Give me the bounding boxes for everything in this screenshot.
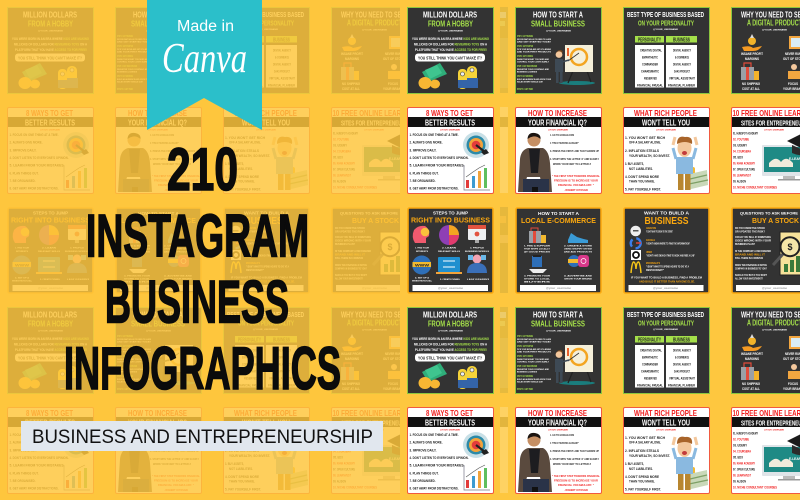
tile: questions to ask before buying a stock: IS THE COMPANY A RECOGNIZED xyxy=(735,250,771,253)
tile: how to increase your financial iq: 3. PRESS THE FIRST LINK THAT SHOWS UP xyxy=(550,149,599,153)
tile: how to start a small business: RAISE THE MONEY YOU NEED AND xyxy=(517,58,549,61)
tile: questions to ask before buying a stock: BUSINESS PLAN? xyxy=(735,243,756,246)
tile: 8 ways to get better results: 1. FOCUS ON ONE THING AT A TIME. xyxy=(410,133,458,137)
tile: best type of business based on your personality: VIRTUAL ASSISTANT xyxy=(669,76,695,81)
tile: how to start a local e-commerce: STORE TO LOCAL xyxy=(524,278,551,280)
tile: how to start a small business: AND YOUR FIRST PRODUCTS xyxy=(517,50,552,54)
tile: how to start a small business: STEP 1: GET TRAINING xyxy=(517,35,533,38)
tile: million dollars from a hobby: YOU STILL THINK YOU CAN'T MAKE IT? xyxy=(418,55,482,60)
tile: how to start a small business: STEP 3: GET FUNDING xyxy=(517,56,533,58)
tile: questions to ask before buying a stock: SHOULD YOU BUY IF YOU DON'T xyxy=(735,274,767,277)
tile: 10 free online learning sites for entrepreneurs: 04. COURSERA xyxy=(733,150,751,154)
tile: want to build a business: AMAZON xyxy=(646,227,656,230)
tile: best type of business based on your personality: RESERVED xyxy=(644,76,657,81)
tile: what rich people won't tell you: WON'T TELL YOU xyxy=(642,118,690,127)
tile: 10 free online learning sites for entrepreneurs: 06. KHAN ACADEMY xyxy=(733,162,755,166)
tile: how to increase your financial iq: 4. START WITH THE LETTER 'A' AND SLOWLY xyxy=(550,157,599,161)
tile: how to start a local e-commerce: USING SHOPIFY OR WIX xyxy=(564,248,593,250)
tile: million dollars from a hobby: FROM A HOBBY xyxy=(428,19,473,29)
tile: what rich people won't tell you: NOT LIABILITIES. xyxy=(629,167,653,171)
tile: how to start a local e-commerce: LOCAL E-COMMERCE xyxy=(521,218,596,225)
tile: 8 ways to get better results: 8. GET AWAY FROM DISTRACTIONS. xyxy=(410,187,458,191)
tile: want to build a business: "I DON'T WANT TO GROW TO THE STORE" xyxy=(646,230,673,234)
tile: 10 free online learning sites for entrepreneurs: @YOUR_USERNAME xyxy=(764,128,784,131)
tile: million dollars from a hobby: PLATFORM THAT YOU HAVE ACCESS TO FOR FREE! xyxy=(415,48,487,52)
tile: best type of business based on your personality: @YOUR_USERNAME xyxy=(653,28,679,31)
tile: how to increase your financial iq: " THE FIRST STEP TOWARDS FINANCIAL xyxy=(552,174,600,178)
tile row 4 and row 5: repeated tiles xyxy=(408,308,800,494)
faded strip between first and second tile columns xyxy=(500,7,508,493)
tile: want to build a business: IF YOU WANT TO BUILD A BUSINESS, FIND A PROBLEM xyxy=(631,276,702,280)
tile: steps to jump right into business: RIGHT INTO BUSINESS xyxy=(411,216,490,225)
tile: best type of business based on your personality xyxy=(624,8,710,94)
tile: steps to jump right into business: 6. BUILD YOUR AUDIENCE xyxy=(467,278,489,281)
tile: million dollars from a hobby xyxy=(408,8,494,94)
tile: how to start a small business: STEP 6: GET PAID xyxy=(517,88,533,91)
tile: million dollars from a hobby: @YOUR_USERNAME xyxy=(438,29,464,32)
tile: 10 free online learning sites for entrepreneurs: 05. EDX xyxy=(733,156,744,160)
tile: best type of business based on your personality: EMPATHETIC xyxy=(642,54,658,59)
tile: questions to ask before buying a stock: BRAND AND WILL IT xyxy=(735,254,766,256)
tile: best type of business based on your personality: BUSINESS xyxy=(673,37,690,43)
tile: how to start a small business: @YOUR_USERNAME xyxy=(546,29,572,32)
title: 210 instagram business infographics: INFOGRAPHICS xyxy=(64,335,341,402)
tile: how to start a local e-commerce: GROW YOUR BRAND xyxy=(564,278,593,280)
tile: questions to ask before buying a stock: ALLOW YOUR INVESTMENT? xyxy=(735,278,763,280)
tile: want to build a business: "I DON'T HAVE ENOUGH TIME TO BOOK AND RIDE A CAB" xyxy=(646,254,695,258)
tile: why you need to sell a digital product: FOCUS xyxy=(788,82,798,86)
tile wall on the right half xyxy=(408,8,800,494)
tile: want to build a business xyxy=(624,208,709,293)
faded tile wall on the left half xyxy=(8,8,418,494)
tile: how to start a local e-commerce: AT GOOD PRICES xyxy=(524,250,551,254)
tile: want to build a business: GOOGLE xyxy=(646,239,655,242)
title: 210 instagram business infographics: INSTAGRAM xyxy=(86,202,309,270)
tile: what rich people won't tell you: 4. DON'T SPEND MORE xyxy=(625,175,659,179)
tile: what rich people won't tell you: YOUR WEALTH, SO INVEST. xyxy=(629,154,670,158)
tile: 10 free online learning sites for entrepreneurs: 01. HUBSPOT ACADEMY xyxy=(733,132,758,136)
tile: questions to ask before buying a stock: DOES THE FINANCIALS MATCH xyxy=(735,264,767,267)
tile: how to start a local e-commerce: THAT SHIPS LOCALLY xyxy=(524,248,551,250)
tile: want to build a business: MCDONALD'S xyxy=(646,262,660,265)
tile: how to start a small business: SMALL BUSINESS xyxy=(531,19,585,29)
tile: questions to ask before buying a stock: GOES WRONG WITH YOUR xyxy=(735,240,771,242)
tile: questions to ask before buying a stock: DO YOU KNOW THE STOCK xyxy=(735,227,765,230)
tile: how to increase your financial iq: 1. GO TO GOOGLE.COM xyxy=(550,133,574,137)
tile: best type of business based on your personality: FINANCIAL PLANNER xyxy=(668,83,695,88)
tile: what rich people won't tell you xyxy=(624,108,710,194)
tile: 8 ways to get better results: @YOUR_USERNAME xyxy=(440,128,460,131)
ribbon: made in canva: Made in xyxy=(177,18,234,35)
tile: 10 free online learning sites for entrepreneurs: 09. ALISON xyxy=(733,180,746,184)
tile: why you need to sell a digital product xyxy=(732,8,800,94)
ribbon: made in canva: Canva xyxy=(162,36,247,82)
tile: 8 ways to get better results: 4. DON'T LISTEN TO EVERYONE'S OPINION. xyxy=(410,156,468,160)
tile: steps to jump right into business: WWW xyxy=(415,263,430,267)
tile: how to increase your financial iq: HOW TO INCREASE xyxy=(528,108,587,118)
tile: how to start a local e-commerce: 2. CREATE A STORE xyxy=(564,244,593,248)
tile: questions to ask before buying a stock: OR UPDATED THE RISK? xyxy=(735,230,766,234)
tile: best type of business based on your personality: ON YOUR PERSONALITY xyxy=(638,18,694,27)
tile: how to start a local e-commerce: 3. PROMOTE YOUR xyxy=(524,276,551,278)
tile: best type of business based on your personality: E-COMMERCE xyxy=(675,54,689,59)
tile: steps to jump right into business: STEPS TO JUMP xyxy=(433,210,468,216)
tile: how to increase your financial iq xyxy=(516,108,602,194)
tile: how to start a small business: BUILD AN AUDIENCE AND GROW YOUR xyxy=(517,78,551,81)
tile: what rich people won't tell you: 2. INFLATION STEALS xyxy=(625,149,659,153)
tile: questions to ask before buying a stock: QUESTIONS TO ASK BEFORE xyxy=(740,211,798,216)
tile: what rich people won't tell you: OFF A SALARY ALONE. xyxy=(629,140,661,144)
tile: 8 ways to get better results: 2. ALWAYS GIVE MORE. xyxy=(410,141,442,145)
tile: want to build a business: AND BUILD IT BETTER THAN ANYONE ELSE. xyxy=(639,280,695,284)
tile: what rich people won't tell you: @YOUR_USERNAME xyxy=(656,128,676,131)
tile: how to increase your financial iq: FREEDOM IS TO INCREASE YOUR xyxy=(554,178,599,182)
tile: 8 ways to get better results: 6. PLAN THINGS OUT. xyxy=(410,171,439,175)
tile: 8 ways to get better results: 3. IMPROVE DAILY. xyxy=(410,148,436,152)
tile: 10 free online learning sites for entrepreneurs: 02. YOUTUBE xyxy=(733,138,750,142)
tile: questions to ask before buying a stock: STILL THERE IN 10 MONTHS xyxy=(735,257,763,260)
tile: why you need to sell a digital product: NO SHIPPING xyxy=(742,82,760,86)
tile: best type of business based on your personality: CREATIVE DIGITAL xyxy=(640,47,662,52)
tile: questions to ask before buying a stock: COULD YOU SELL IF SOMETHING xyxy=(735,236,771,239)
tile: million dollars from a hobby: MILLIONS OF DOLLARS FOR REVIEWING TOYS ON A xyxy=(414,42,487,46)
tile: how to start a local e-commerce: 4. ADVERTISE AND xyxy=(564,274,593,278)
tile: steps to jump right into business: 5. CREATE FUNNEL xyxy=(440,278,461,281)
tile: 10 free online learning sites for entrepreneurs xyxy=(732,108,800,194)
tile: steps to jump right into business: WEBSITE/SOCIAL xyxy=(412,280,433,282)
tile: best type of business based on your personality: CHARISMATIC xyxy=(641,68,659,74)
tile: best type of business based on your personality: COMMANDER xyxy=(642,61,658,66)
tile: best type of business based on your personality: BEST TYPE OF BUSINESS BASED xyxy=(627,10,704,19)
tile: what rich people won't tell you: 3. BUY ASSETS, xyxy=(625,162,644,166)
tile: want to build a business: WANT TO BUILD A xyxy=(644,211,690,216)
tile: how to increase your financial iq: @YOUR_USERNAME xyxy=(548,128,568,131)
tile: why you need to sell a digital product: COST AT ALL xyxy=(742,87,760,91)
tile: want to build a business: @your_username xyxy=(653,286,678,290)
tile: 8 ways to get better results xyxy=(408,108,494,194)
title: 210 instagram business infographics: 210 xyxy=(167,136,238,203)
subtitle banner: BUSINESS AND ENTREPRENEURSHIP xyxy=(32,426,373,448)
tile: 10 free online learning sites for entrepreneurs: 08. LEARNVEST xyxy=(733,174,752,178)
tile: how to start a local e-commerce: AND ADD PRODUCTS xyxy=(564,250,593,254)
tile: how to start a small business: PICK YOUR NICHE AND SET UP A BRAND xyxy=(517,48,551,51)
tile: 8 ways to get better results: 5. LEARN FROM YOUR MISTAKES. xyxy=(410,164,464,168)
title: 210 instagram business infographics xyxy=(64,136,341,402)
tile: how to start a small business: AND GET STARTED TODAY xyxy=(517,40,552,44)
tile: best type of business based on your personality: SAAS PRODUCT xyxy=(674,68,690,74)
tile: how to start a small business: STEP 2: GET STARTED xyxy=(517,45,533,48)
ribbon: made in canva xyxy=(147,0,262,130)
tile: million dollars from a hobby: YOU WERE BORN IN AN ERA WHERE KIDS ARE MAKING xyxy=(412,37,489,41)
tile: how to start a small business xyxy=(516,8,602,94)
tile: how to start a small business: STEP 4: GET REGISTERED xyxy=(517,65,537,68)
tile: want to build a business: "I DON'T KNOW WHERE TO FIND THE INFORMATION" xyxy=(646,242,690,246)
tile: 10 free online learning sites for entrepreneurs: 03. UDEMY xyxy=(733,144,748,148)
tile: how to start a small business: CONTROL YOUR COSTS EARLY xyxy=(517,60,550,64)
tile: want to build a business: UBER xyxy=(646,251,652,254)
tile: 10 free online learning sites for entrepreneurs: 10. NICHE CONSULTANT COURSES xyxy=(733,186,778,190)
tile: how to start a small business: STEP 5: GET GROWING xyxy=(517,76,533,78)
tile: what rich people won't tell you: 1. YOU WON'T GET RICH xyxy=(625,136,665,140)
tile: million dollars from a hobby: MILLION DOLLARS xyxy=(423,10,477,20)
tile: steps to jump right into business: 2. LEARN xyxy=(442,246,457,250)
tile: what rich people won't tell you: 5. PAY YOURSELF FIRST. xyxy=(625,188,661,192)
tile: steps to jump right into business: RELEVANT SKILLS xyxy=(438,250,461,253)
title: 210 instagram business infographics: BUSINESS xyxy=(105,268,289,336)
tile: steps to jump right into business: INTERESTS xyxy=(416,251,429,253)
tile: best type of business based on your personality: DIGITAL AGENCY xyxy=(673,47,691,52)
tile: how to start a local e-commerce: @your_username xyxy=(546,286,571,290)
tile: why you need to sell a digital product: @YOUR_USERNAME xyxy=(762,28,788,32)
tile: want to build a business: BUSINESS xyxy=(644,216,689,227)
tile: how to start a small business: HOW TO START A xyxy=(533,10,583,20)
tile: steps to jump right into business: BUSINESS MODELS xyxy=(465,251,490,253)
tile: what rich people won't tell you: THAN YOU MAKE. xyxy=(629,180,655,184)
tile: how to start a small business: DECIDE WHAT SKILLS YOU NEED TO LEARN xyxy=(517,38,551,41)
tile: how to start a small business: REGISTER YOUR COMPANY AND xyxy=(517,68,549,71)
tile: questions to ask before buying a stock: $ xyxy=(788,242,792,252)
tile: best type of business based on your personality: FINANCIAL FRUGAL xyxy=(637,83,663,88)
tile: what rich people won't tell you: WHAT RICH PEOPLE xyxy=(634,108,697,118)
tile: how to start a small business: SALES EVERY SINGLE DAY xyxy=(517,80,544,84)
tile: 8 ways to get better results: 7. BE ORGANISED. xyxy=(410,179,436,183)
tile: steps to jump right into business xyxy=(408,208,493,293)
tile: how to increase your financial iq: FINANCIAL VOCABULARY. " xyxy=(558,183,595,187)
tile: how to start a local e-commerce: 1. FIND A SUPPLIER xyxy=(524,244,551,248)
tile: why you need to sell a digital product: MARGINS xyxy=(745,57,759,61)
tile: 8 ways to get better results: 8 WAYS TO GET xyxy=(426,108,474,118)
tile: steps to jump right into business: 1. FIND YOUR xyxy=(415,248,429,250)
tile: want to build a business: RESTAURANT" xyxy=(646,269,664,272)
tile: how to increase your financial iq: YOUR FINANCIAL IQ? xyxy=(528,118,587,127)
tile: how to start a local e-commerce: BUYERS xyxy=(524,282,552,284)
tile: want to build a business: "I DON'T WANT TO SPEND HOURS TO EAT AT A xyxy=(646,266,689,268)
tile: 10 free online learning sites for entrepreneurs: 07. OPEN CULTURE xyxy=(733,168,756,172)
tile: how to increase your financial iq: WORK YOUR WAY TO LETTER Z xyxy=(553,162,591,166)
tile: why you need to sell a digital product: INSANE PROFIT xyxy=(741,52,763,56)
tile: how to increase your financial iq: - ROBERT KIYOSAKI xyxy=(564,188,588,192)
tile: how to increase your financial iq: 2. TYPE IN "INVESTING GLOSSARY" xyxy=(550,141,579,145)
tile: questions to ask before buying a stock: @your_username xyxy=(762,286,787,290)
tile: how to start a local e-commerce xyxy=(516,208,601,293)
tile: steps to jump right into business: @your_username xyxy=(438,286,463,290)
tile: questions to ask before buying a stock xyxy=(732,208,800,293)
tile: questions to ask before buying a stock: COMPANY IN BUSINESS TO YOU? xyxy=(735,268,767,270)
tile: steps to jump right into business: 3. PROFILE xyxy=(470,248,485,250)
tile: best type of business based on your personality: DIGITAL AGENCY xyxy=(673,61,691,66)
tile: 8 ways to get better results: BETTER RESULTS xyxy=(425,118,475,127)
tile: steps to jump right into business: 4. SET UP A xyxy=(415,276,429,280)
tile: how to start a local e-commerce: HOW TO START A xyxy=(538,211,580,216)
tile: how to start a small business: BUSINESS LICENSES xyxy=(517,72,538,74)
tile: best type of business based on your personality: PERSONALITY xyxy=(638,37,661,43)
